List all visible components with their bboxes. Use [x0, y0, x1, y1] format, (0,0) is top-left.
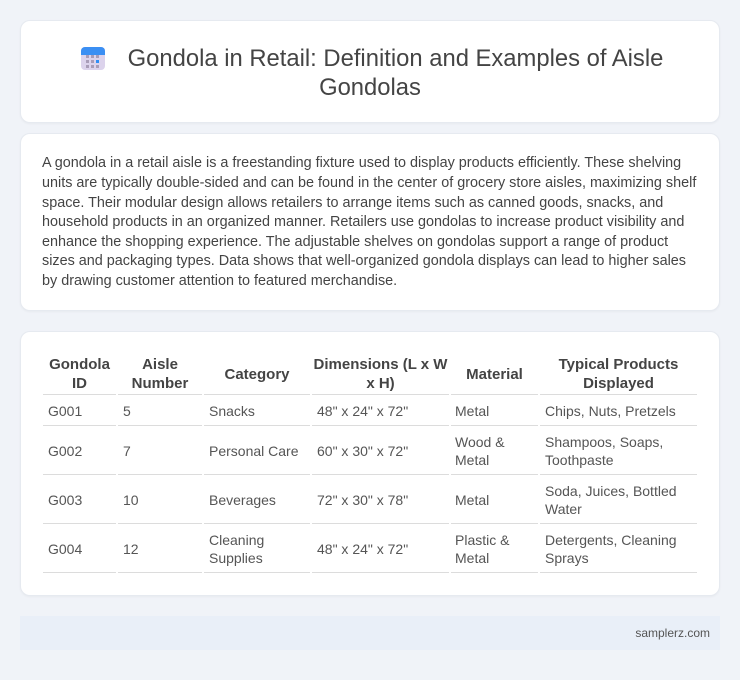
header: Dimensions: x H)	[366, 375, 395, 392]
header: Typical Products Displayed: Displayed	[583, 375, 654, 392]
row G004	[48, 532, 677, 566]
row G004: Sprays	[545, 550, 589, 566]
table	[43, 356, 697, 573]
row G001: G001	[48, 403, 82, 419]
row G003: Metal	[455, 492, 489, 508]
row G004: Detergents, Cleaning	[545, 532, 677, 548]
row G004: Cleaning	[209, 532, 264, 548]
row G001	[48, 403, 676, 419]
header: Aisle Number: Aisle	[142, 356, 178, 373]
row G002: 60" x 30" x 72"	[317, 443, 408, 459]
header: Gondola ID: Gondola	[49, 356, 110, 373]
header: Dimensions: Dimensions (L x W	[314, 356, 447, 373]
row G002	[48, 434, 663, 468]
footer bar	[20, 616, 720, 650]
row G004: Supplies	[209, 550, 263, 566]
row G001: 5	[123, 403, 131, 419]
footer text: samplerz.com	[635, 626, 710, 640]
panel: table	[20, 331, 720, 596]
header: Typical Products Displayed	[558, 356, 678, 392]
row G002: G002	[48, 443, 82, 459]
row G004: 12	[123, 541, 139, 557]
header: Aisle Number	[132, 356, 188, 392]
row G004: G004	[48, 541, 82, 557]
row G002: Toothpaste	[545, 452, 614, 468]
header: Gondola ID	[49, 356, 110, 392]
row G003: 10	[123, 492, 139, 508]
row G003: Beverages	[209, 492, 276, 508]
header: Aisle Number: Number	[132, 375, 188, 392]
row G003: Water	[545, 501, 582, 517]
description text: space. Their modular design allows retailers to arrange items such as canned goods, snacks, and	[42, 195, 663, 211]
header: Gondola ID: ID	[72, 375, 87, 392]
row G002: 7	[123, 443, 131, 459]
panel: description	[20, 133, 720, 311]
header: Category: Category	[224, 366, 290, 383]
icon: calendar grid	[81, 47, 105, 70]
row G003	[48, 483, 677, 517]
description text: household products in an organized manner. Retailers use gondolas to increase product visibility and	[42, 214, 684, 230]
description text: sizes and packaging types. Data shows that well-organized gondola displays can lead to higher sales	[42, 253, 686, 269]
row G003: Soda, Juices, Bottled	[545, 483, 677, 499]
row G002: Shampoos, Soaps,	[545, 434, 663, 450]
row G002: Wood &	[455, 434, 505, 450]
header: Dimensions	[314, 356, 448, 392]
row G001: Snacks	[209, 403, 255, 419]
row G002: Personal Care	[209, 443, 298, 459]
title	[128, 45, 663, 101]
title: Gondolas	[319, 74, 421, 101]
row G001: Chips, Nuts, Pretzels	[545, 403, 676, 419]
row G002: Metal	[455, 452, 489, 468]
description text: enhance the shopping experience. The adjustable shelves on gondolas support a range of product	[42, 234, 668, 250]
row G003: 72" x 30" x 78"	[317, 492, 408, 508]
description text: units are typically double-sided and can be found in the center of grocery store aisles, maximizing shelf	[42, 175, 696, 191]
row G001: 48" x 24" x 72"	[317, 403, 408, 419]
row G004: 48" x 24" x 72"	[317, 541, 408, 557]
description text: A gondola in a retail aisle is a freestanding fixture used to display products efficiently. These shelving	[42, 155, 681, 171]
row G004: Plastic &	[455, 532, 509, 548]
description text	[42, 155, 696, 289]
row lines	[43, 394, 697, 573]
header: Material: Material	[466, 366, 523, 383]
row G001: Metal	[455, 403, 489, 419]
row G003: G003	[48, 492, 82, 508]
header: Typical Products Displayed: Typical Products	[559, 356, 678, 373]
row G004: Metal	[455, 550, 489, 566]
title: Gondola in Retail: Definition and Examples of Aisle	[128, 45, 663, 72]
description text: by drawing customer attention to featured merchandise.	[42, 273, 397, 289]
title card	[20, 20, 720, 123]
